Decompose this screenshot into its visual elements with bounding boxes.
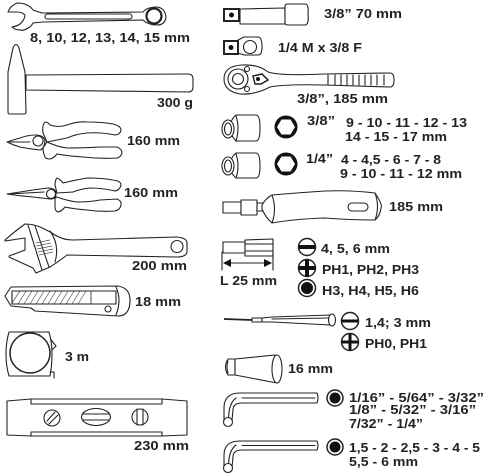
combination pliers [7,122,122,159]
combination wrench [8,3,166,30]
icon: slotted bit [298,238,316,256]
hex key metric [224,441,318,472]
deep socket label: 16 mm [288,361,333,376]
icon: phillips bit [298,260,316,276]
dimension label: spirit level: 230 mm [134,438,189,453]
drive size 3/8: 3/8” [307,113,335,128]
socket 3/8 [222,115,260,141]
bit holder screwdriver [223,191,381,223]
adapter label: 1/4 M x 3/8 F [278,40,362,55]
inch hex key sizes: 1/8” - 5/32” - 3/16” [349,402,476,417]
phillips sizes: PH1, PH2, PH3 [322,262,419,277]
icon: hex socket 3/8 [274,116,298,138]
dimension label: long nose pliers: 160 mm [124,185,178,200]
extension bar label: 3/8” 70 mm [324,6,402,21]
spirit level [7,399,187,436]
screwdriver label: 185 mm [389,199,443,214]
precision phillips sizes: PH0, PH1 [365,336,427,351]
hammer weight label: 300 g [157,95,193,110]
dimension label: tape measure: 3 m [65,349,89,364]
hammer [8,44,193,114]
dimension label: pliers: 160 mm [127,133,180,148]
hex key inch [224,393,318,426]
drive size 1/4: 1/4” [306,151,333,166]
socket adapter [224,37,262,55]
icon: precision slotted [342,312,358,330]
socket sizes 1/4: 9 - 10 - 11 - 12 mm [340,166,462,181]
socket sizes 1/4 [340,152,462,181]
inch hex key sizes: 7/32” - 1/4” [349,416,423,431]
dimension label: adjustable wrench: 200 mm [132,258,187,273]
ratchet handle [224,65,394,94]
ratchet label: 3/8”, 185 mm [297,91,388,106]
socket sizes 1/4: 4 - 4,5 - 6 - 7 - 8 [341,152,441,167]
socket sizes 3/8: 14 - 15 - 17 mm [345,129,447,144]
bit length label: L 25 mm [220,273,277,288]
tape measure [6,332,56,378]
metric hex key sizes [349,440,480,469]
hex sizes: H3, H4, H5, H6 [322,283,419,298]
socket 1/4 [222,153,260,178]
slotted sizes: 4, 5, 6 mm [321,241,390,256]
adjustable wrench [5,224,187,273]
icon: hex key metric [327,439,343,455]
metric hex key sizes: 1,5 - 2 - 2,5 - 3 - 4 - 5 [349,440,480,455]
utility knife [5,286,130,316]
inch hex key sizes [349,390,484,431]
socket extension bar [224,4,308,25]
icon: precision phillips [342,334,358,350]
precision screwdriver [224,314,336,326]
precision slotted sizes: 1,4; 3 mm [365,315,431,330]
icon: hex key inch [327,390,343,406]
screwdriver bit with dimension [222,239,273,270]
long nose pliers [7,178,121,212]
socket sizes 3/8: 9 - 10 - 11 - 12 - 13 [346,115,467,130]
icon: hex socket 1/4 [274,152,298,176]
icon: hex bit [298,280,316,296]
inch hex key sizes: 1/16” - 5/64” - 3/32” [349,390,484,405]
socket sizes 3/8 [345,115,467,144]
wrench sizes label: 8, 10, 12, 13, 14, 15 mm [30,30,190,45]
deep socket [226,355,282,383]
dimension label: utility knife: 18 mm [135,294,181,309]
metric hex key sizes: 5,5 - 6 mm [349,454,418,469]
